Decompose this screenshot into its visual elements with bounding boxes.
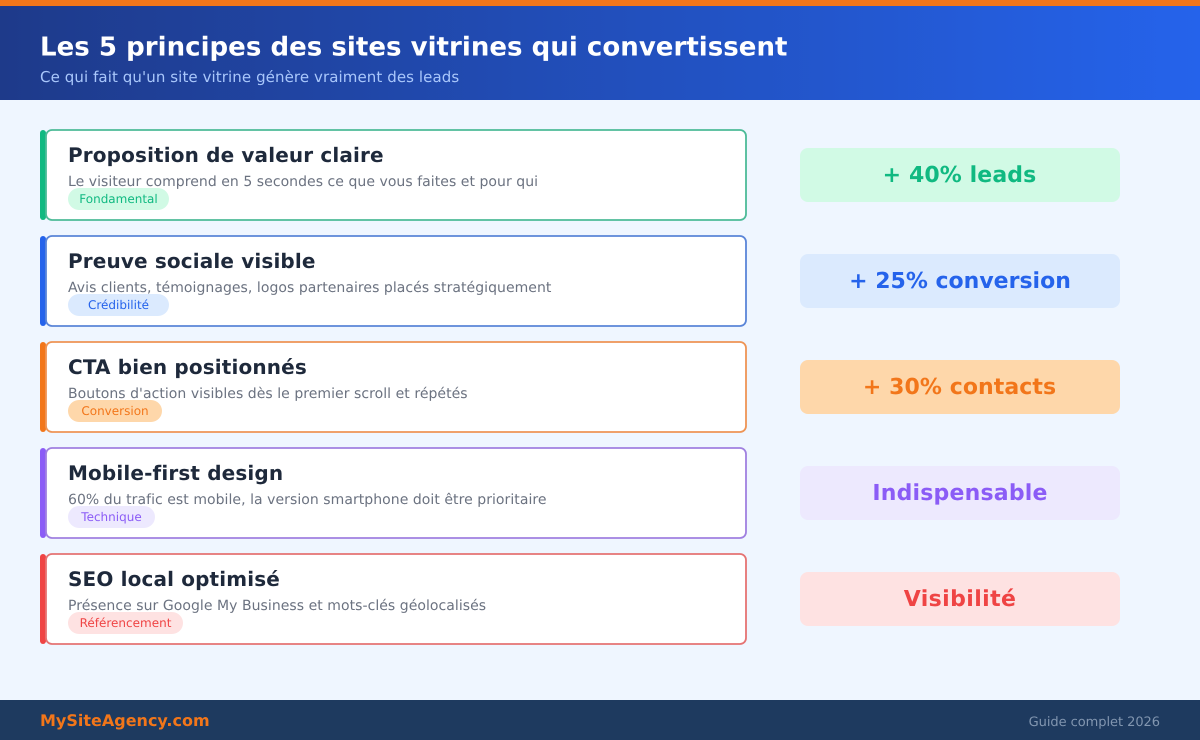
card 5 tag: Référencement — [80, 616, 172, 630]
callout: Visibilité: Visibilité — [904, 587, 1016, 612]
card 4 heading: Mobile-first design — [68, 461, 283, 485]
card 5 tag — [68, 612, 183, 634]
card 4 tag: Technique — [80, 510, 142, 524]
card 3 tag: Conversion — [81, 404, 149, 418]
callout: + 30% contacts — [800, 360, 1120, 414]
card 1 tag — [68, 188, 169, 210]
card 3 description: Boutons d'action visibles dès le premier scroll et répétés — [68, 386, 468, 402]
panel: card 2 — [40, 236, 746, 326]
card 1 description: Le visiteur comprend en 5 secondes ce que vous faites et pour qui — [68, 174, 538, 190]
card 5 description: Présence sur Google My Business et mots-clés géolocalisés — [68, 598, 486, 614]
card 2 tag — [68, 294, 169, 316]
card 3 tag — [68, 400, 162, 422]
card 5 heading: SEO local optimisé — [68, 567, 280, 591]
callout: Indispensable — [800, 466, 1120, 520]
card 1 tag: Fondamental — [79, 192, 158, 206]
callout: + 30% contacts: + 30% contacts — [863, 375, 1056, 400]
card 1 heading: Proposition de valeur claire — [68, 143, 384, 167]
panel: card 3 — [40, 342, 746, 432]
card 2 heading: Preuve sociale visible — [68, 249, 316, 273]
card 2 description: Avis clients, témoignages, logos partenaires placés stratégiquement — [68, 280, 552, 296]
header — [0, 0, 1200, 100]
callout: Indispensable: Indispensable — [872, 481, 1048, 506]
subtitle: Ce qui fait qu'un site vitrine génère vraiment des leads — [40, 68, 459, 86]
footer — [0, 700, 1200, 740]
panel: card 5 — [40, 554, 746, 644]
callout: + 40% leads — [800, 148, 1120, 202]
card 4 tag — [68, 506, 155, 528]
footer brand: MySiteAgency.com — [40, 711, 210, 730]
callout: Visibilité — [800, 572, 1120, 626]
title: Les 5 principes des sites vitrines qui convertissent — [40, 32, 788, 62]
callout: + 25% conversion — [800, 254, 1120, 308]
panel: card 4 — [40, 448, 746, 538]
card 3 heading: CTA bien positionnés — [68, 355, 307, 379]
callout: + 40% leads: + 40% leads — [883, 163, 1036, 188]
panel: card 1 — [40, 130, 746, 220]
card 2 tag: Crédibilité — [88, 298, 149, 312]
footer note: Guide complet 2026 — [1029, 715, 1160, 730]
card 4 description: 60% du trafic est mobile, la version smartphone doit être prioritaire — [68, 492, 547, 508]
callout: + 25% conversion: + 25% conversion — [849, 269, 1071, 294]
